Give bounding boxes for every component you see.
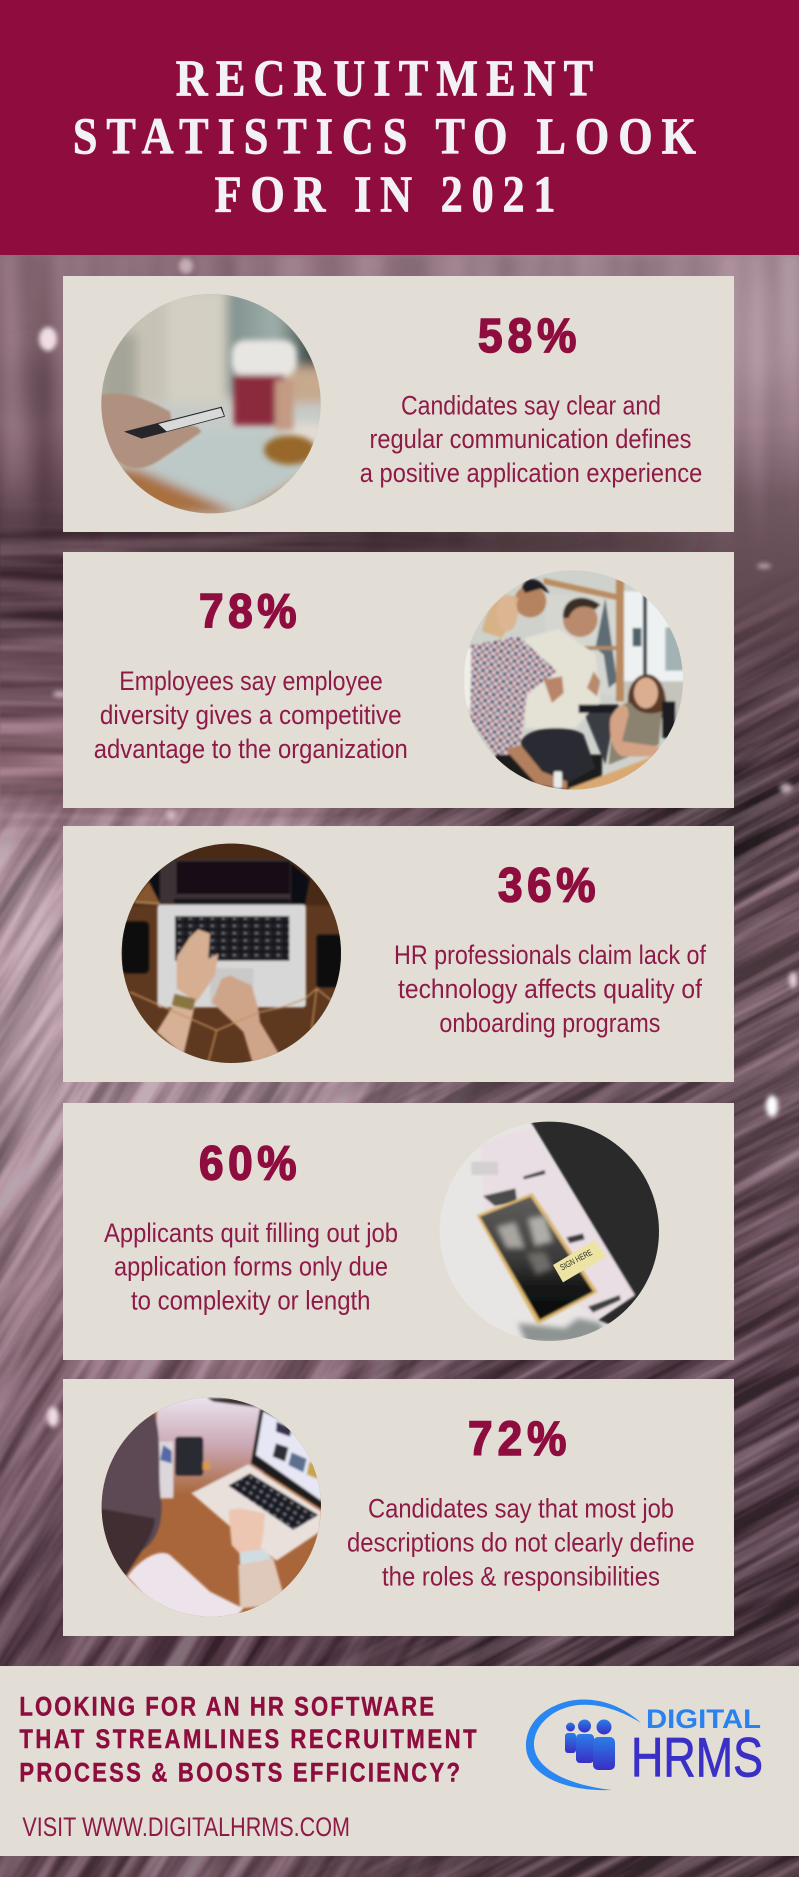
photo: hand holding phone in cafe <box>100 290 326 516</box>
photo: phone on a form with sign here note <box>438 1120 664 1346</box>
description text <box>394 940 706 1038</box>
stat: 60%: 60% <box>199 1136 297 1190</box>
description text <box>104 1218 398 1316</box>
description text: a positive application experience <box>360 458 702 488</box>
description text: onboarding programs <box>439 1008 660 1038</box>
panel: 58% communication <box>63 276 734 532</box>
call to action heading: LOOKING FOR AN HR SOFTWARE <box>19 1692 434 1722</box>
title text: STATISTICS TO LOOK <box>73 108 696 165</box>
panel: 36% technology <box>63 826 734 1082</box>
description text: the roles & responsibilities <box>382 1561 660 1591</box>
description text: Candidates say clear and <box>401 390 661 420</box>
description text: descriptions do not clearly define <box>347 1527 695 1557</box>
photo: woman working on laptop at wooden desk <box>100 1395 326 1621</box>
call to action heading: THAT STREAMLINES RECRUITMENT <box>19 1725 477 1755</box>
call to action heading: PROCESS & BOOSTS EFFICIENCY? <box>19 1758 460 1788</box>
logo: Digital HRMS: HRMS <box>631 1726 763 1789</box>
website link text: VISIT WWW.DIGITALHRMS.COM <box>22 1812 350 1842</box>
title text: FOR IN 2021 <box>215 166 555 223</box>
call to action heading <box>19 1692 477 1788</box>
logo wordmark: DIGITAL <box>646 1704 761 1734</box>
photo: hands typing on laptop <box>120 842 346 1068</box>
stat: 58%: 58% <box>478 308 576 362</box>
photo: team around a table <box>462 568 688 794</box>
title banner <box>0 0 799 255</box>
logo crescent <box>526 1700 641 1790</box>
description text: Candidates say that most job <box>368 1494 674 1524</box>
stat: 78%: 78% <box>199 584 297 638</box>
panel: call to action footer <box>0 1666 799 1856</box>
description text: regular communication defines <box>370 424 692 454</box>
description text: application forms only due <box>114 1252 388 1282</box>
panel: 78% diversity <box>63 552 734 808</box>
sticky note wording: SIGN HERE <box>558 1247 594 1272</box>
description text: to complexity or length <box>131 1286 370 1316</box>
logo people icon <box>565 1720 615 1770</box>
logo: Digital HRMS <box>526 1700 763 1790</box>
description text: diversity gives a competitive <box>100 700 402 730</box>
description text <box>347 1494 695 1591</box>
description text: Employees say employee <box>119 666 383 696</box>
stat: 36%: 36% <box>498 858 596 912</box>
panel: 72% job descriptions <box>63 1379 734 1636</box>
stat: 72%: 72% <box>468 1411 566 1465</box>
panel: 60% application forms <box>63 1103 734 1360</box>
title text <box>73 50 696 223</box>
description text: Applicants quit filling out job <box>104 1218 398 1248</box>
description text <box>94 666 408 764</box>
title text: RECRUITMENT <box>176 50 593 108</box>
description text <box>360 390 702 488</box>
description text: technology affects quality of <box>398 974 702 1004</box>
description text: HR professionals claim lack of <box>394 940 706 970</box>
description text: advantage to the organization <box>94 734 408 764</box>
